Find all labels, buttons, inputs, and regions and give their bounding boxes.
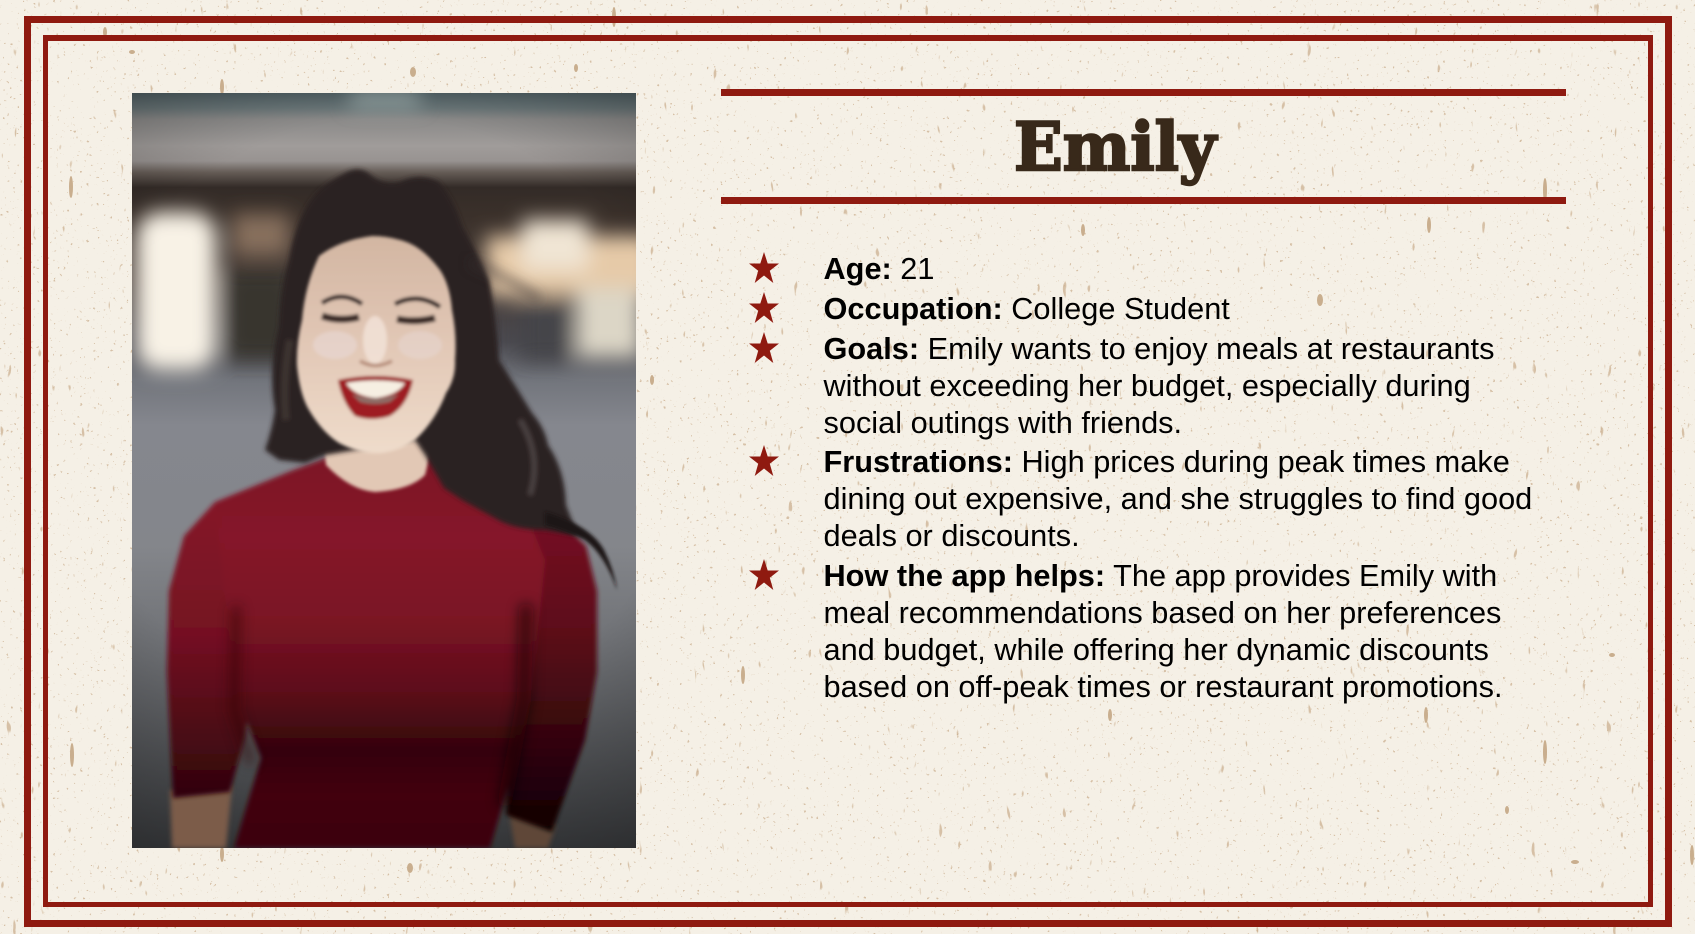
list item: frustrations: deals or discounts. xyxy=(824,518,1080,552)
hair xyxy=(265,169,578,536)
list item: goals: social outings with friends. xyxy=(824,404,1182,440)
list item: age xyxy=(749,250,934,286)
list item: occupation: Occupation: College Student xyxy=(824,290,1230,326)
list item: how the app helps: How the app helps: The app provides Emily with xyxy=(824,558,1497,592)
list item: age: Age: 21 xyxy=(824,250,934,286)
hair strand xyxy=(545,512,617,590)
face xyxy=(297,236,456,453)
hair wisp xyxy=(470,262,540,300)
title: Emily xyxy=(1014,108,1218,186)
list item: frustrations: dining out expensive, and she struggles to find good xyxy=(824,480,1532,516)
title rule bottom xyxy=(721,197,1566,204)
list item: how the app helps xyxy=(749,558,1503,704)
dress xyxy=(167,450,597,848)
photo: portrait of Emily xyxy=(132,93,762,848)
arms xyxy=(170,785,556,848)
list item: how the app helps: based on off-peak times or restaurant promotions. xyxy=(824,668,1503,704)
list item: frustrations xyxy=(749,444,1532,552)
list item: how the app helps: meal recommendations based on her preferences xyxy=(824,594,1501,630)
dress seam shadows xyxy=(234,610,526,800)
list item: goals xyxy=(749,330,1494,440)
persona details list xyxy=(749,250,1532,704)
list item: goals: without exceeding her budget, especially during xyxy=(824,368,1471,402)
list item: how the app helps: and budget, while offering her dynamic discounts xyxy=(824,632,1489,666)
neck xyxy=(322,430,436,492)
list item: frustrations: Frustrations: High prices during peak times make xyxy=(824,444,1510,478)
list item: goals: Goals: Emily wants to enjoy meals at restaurants xyxy=(824,330,1494,366)
title rule top xyxy=(721,89,1566,96)
